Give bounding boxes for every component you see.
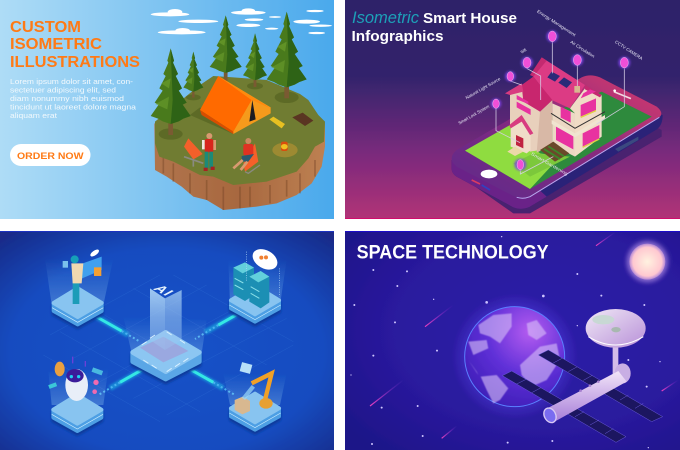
platform: robot (48, 357, 108, 434)
phone shadow (452, 93, 662, 213)
panel: custom isometric illustrations (0, 0, 334, 219)
windows (516, 89, 599, 149)
feature labels: CCTV CAMERA (614, 39, 644, 61)
tent (190, 76, 271, 134)
title: isometric smart house infographics: Isometric (352, 8, 419, 27)
garden bed (540, 142, 569, 162)
logs and bag (269, 113, 313, 128)
feature labels: Energy Management (536, 9, 577, 38)
feature labels: Smart Lock System (457, 104, 490, 126)
front wall (552, 103, 575, 157)
station (541, 343, 631, 425)
text block: lorem ipsum: sectetuer adipiscing elit, sed (10, 86, 116, 94)
phone body (452, 100, 663, 209)
title: custom isometric illustrations: ISOMETRIC (10, 36, 102, 53)
text block: lorem ipsum: tincidunt ut laoreet dolore magna (10, 102, 137, 112)
platform: person with virtual screen (45, 248, 113, 327)
solar panels (502, 350, 663, 442)
platform: central AI chip (123, 283, 207, 382)
cliff (154, 123, 325, 210)
button: order now: ORDER NOW (17, 151, 84, 162)
sun (627, 241, 668, 282)
right wall (570, 88, 602, 157)
location pins (491, 30, 630, 171)
orange chair (184, 138, 203, 167)
text block: lorem ipsum: aliquam erat (10, 111, 57, 120)
feature labels: Air Circulation (569, 39, 596, 59)
left wall (510, 85, 540, 152)
platform: robot arm and box (223, 362, 287, 433)
house (505, 57, 605, 162)
illustration: phone and house (452, 9, 663, 213)
campfire (272, 142, 298, 157)
meteors (370, 232, 678, 438)
title: custom isometric illustrations: CUSTOM (10, 19, 81, 36)
porch (511, 120, 531, 153)
text block: lorem ipsum (10, 77, 137, 120)
letters AI: AI (150, 283, 178, 298)
seated person (233, 138, 260, 173)
balcony (551, 112, 605, 128)
illustration: camping island (151, 8, 332, 210)
feature labels: Natural Light Source (465, 76, 502, 100)
grass top (155, 76, 325, 185)
standing man (202, 133, 216, 171)
earth (451, 293, 578, 420)
satellite dish (586, 309, 646, 348)
title: space technology: SPACE TECHNOLOGY (357, 242, 549, 263)
centre shadow wall (537, 100, 552, 153)
panel: smart house infographics (345, 0, 680, 219)
panel: ai network (0, 231, 334, 450)
connectors (91, 310, 243, 395)
button: order now (10, 144, 90, 166)
trees (210, 15, 242, 81)
clouds (151, 8, 332, 34)
home button and speaker (472, 89, 638, 190)
title: isometric smart house infographics: Smart House (423, 10, 517, 27)
phone face (452, 75, 661, 199)
text block: lorem ipsum: diam nonummy nibh euismod (10, 94, 124, 103)
feature labels (457, 9, 644, 177)
connector lines (496, 42, 624, 174)
title: custom isometric illustrations: ILLUSTRATIONS (10, 54, 140, 71)
title: isometric smart house infographics: Infographics (352, 28, 444, 45)
feature labels: Smart Gardening (530, 151, 569, 177)
feature labels: Wifi (520, 47, 527, 55)
left gable roof (522, 77, 552, 112)
tree shadows (159, 83, 299, 140)
stars (350, 236, 661, 448)
main roof (533, 57, 585, 108)
panel: space technology (345, 231, 680, 450)
phone screen (465, 92, 652, 189)
text block: lorem ipsum: Lorem ipsum dolor sit amet, con- (10, 77, 134, 86)
platform: cloud servers (228, 245, 287, 325)
title: custom isometric illustrations (10, 19, 140, 71)
title: isometric smart house infographics (352, 8, 517, 45)
solar panels (547, 72, 560, 82)
